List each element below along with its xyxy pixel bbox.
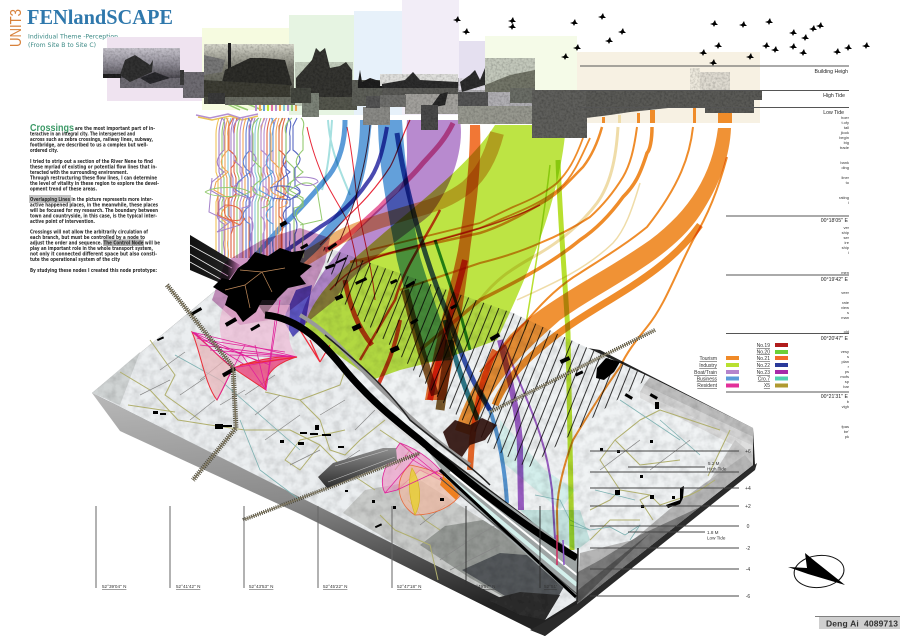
tide callouts: 1.8 M [707, 530, 719, 535]
photo: swing bridge [380, 72, 459, 130]
legend: bus routes: No.21 [757, 356, 770, 362]
right column labels: 00°19'42'' E [821, 277, 849, 283]
elevation scale: 0 [747, 524, 750, 530]
text block: crossings explanation: town and countryside, in this case, is the typical inter- [30, 214, 157, 220]
black city mass [153, 220, 684, 528]
right column labels: b [847, 399, 850, 404]
text block: crossings explanation: play an important role in the whole transport system, [30, 246, 153, 252]
right column labels: i [848, 200, 849, 205]
legend: bus routes: No.22 [757, 363, 770, 369]
elevation scale: -4 [746, 567, 750, 573]
right map sheet [265, 245, 753, 604]
right column labels: rating [839, 195, 849, 200]
right column labels: hoer [841, 115, 850, 120]
elevation scale: -6 [746, 594, 750, 600]
unit label: UNIT3 [8, 9, 25, 47]
latitude scale: 52°49'57'' N [471, 584, 495, 589]
text block: crossings explanation: Overlapping Lines in the picture represents more inter- [30, 197, 153, 203]
right column labels: fpas [841, 424, 849, 429]
photo: lighthouse [458, 58, 535, 124]
latitude scale: 52°41'42'' N [176, 584, 200, 589]
right column labels: vigh [842, 404, 849, 409]
railway lines [167, 285, 655, 520]
legend: flow categories [694, 356, 739, 389]
top comb [256, 105, 296, 111]
right column labels: man [841, 315, 849, 320]
text block: crossings explanation: will be focused for my research. The boundary between [30, 208, 158, 214]
right column labels: i [848, 250, 849, 255]
text block: crossings explanation: these myriad of existing or potential flow lines that in- [30, 164, 157, 170]
thin red and purple stubs on river wall [557, 535, 564, 565]
flock of birds [453, 13, 870, 66]
right column labels: t.ofy [841, 120, 849, 125]
right column labels: ship [842, 245, 850, 250]
latitude scale: 52°45'22'' N [323, 584, 347, 589]
ribbon: business blue, right [378, 120, 452, 362]
right column labels: ship [842, 230, 850, 235]
right column labels: liner [841, 175, 850, 180]
north arrow [788, 553, 846, 590]
legend: flow categories: Industry [699, 363, 717, 369]
legend: bus routes [757, 343, 788, 389]
latitude scale: 52°47'18'' N [397, 584, 421, 589]
photo: cathedral [291, 48, 357, 117]
map roads and waterways [120, 340, 730, 580]
text block: crossings explanation: teractive in an integral city. The interspersed and [30, 132, 135, 138]
main title: FENlandSCAPE [27, 5, 173, 29]
left black striped band [190, 235, 240, 285]
latitude scale: 52°39'04'' N [102, 584, 126, 589]
subtitle [28, 34, 118, 49]
legend: bus routes: No.19 [757, 343, 770, 349]
outlying loops [205, 177, 322, 232]
second dark crossing mass [443, 418, 497, 457]
right column labels: view [841, 305, 849, 310]
third black mass by the railway [560, 356, 620, 380]
right column labels: jlook [840, 130, 849, 135]
flow ribbons between the map and photographs [250, 120, 731, 555]
tide callouts: 5.2 M [708, 461, 720, 466]
photo: town horizon [352, 70, 390, 125]
right column labels: 00°18'05'' E [821, 218, 849, 224]
right column labels: ser [843, 235, 850, 240]
right column labels: ps [845, 369, 849, 374]
right column labels: tall [844, 125, 849, 130]
right column labels: ver [843, 225, 850, 230]
legend: flow categories: Resident [697, 383, 718, 389]
base slab of the model [92, 290, 757, 636]
right column labels: be' [844, 429, 849, 434]
legend: bus routes: Cro.7 [758, 376, 770, 382]
right column labels: to [846, 180, 850, 185]
right column labels: begin [839, 135, 849, 140]
tide callouts [707, 461, 727, 540]
text block: crossings explanation: opment trend of these areas. [30, 186, 97, 192]
elevation scale: +6 [745, 449, 751, 455]
right column labels: pk [845, 434, 849, 439]
magenta haze around the city mass [212, 228, 330, 325]
latitude scale: 52°51' [544, 584, 557, 589]
legend: bus routes: No.20 [757, 350, 770, 356]
text block: crossings explanation: across such as zebra crossings, railway lines, subway, [30, 137, 153, 143]
text block: crossings explanation: By studying these nodes I created this node prototype: [30, 268, 157, 274]
right column labels: Building Heigh [815, 69, 848, 75]
right column labels: s [847, 310, 849, 315]
right column labels: mofs [840, 374, 849, 379]
right column labels: 00°20'47'' E [821, 336, 849, 342]
right column labels: Low Tide [823, 110, 844, 116]
elevation scale: +2 [745, 504, 751, 510]
right column labels: sp [845, 379, 850, 384]
right column labels: rate [842, 300, 850, 305]
right column labels: plan [841, 359, 849, 364]
right column labels: big [844, 140, 849, 145]
legend: flow categories: Boat/Train [694, 370, 717, 376]
ribbon: business blue, left [265, 120, 372, 285]
right column labels: r [848, 364, 850, 369]
right column labels: vesy [841, 349, 849, 354]
legend: flow categories: Business [697, 376, 717, 382]
right column labels: men [841, 270, 849, 275]
ribbon: dark blue lobe [283, 285, 312, 337]
river cross-section wall [577, 548, 578, 602]
legend: flow categories: Tourism [699, 356, 717, 362]
elevation scale: +4 [745, 486, 751, 492]
right column labels: ire [845, 240, 850, 245]
photo strip [103, 43, 762, 138]
pastel panels behind photographs [107, 0, 760, 123]
elevation scale [590, 449, 751, 600]
subtitle: (From Site B to Site C) [28, 42, 96, 49]
right column labels: bank [840, 160, 849, 165]
pink flow web near second crossing [382, 443, 462, 515]
right column labels: old [844, 329, 849, 334]
text block: crossings explanation: adjust the order and sequence. The Control Node will be [30, 240, 160, 246]
text block: crossings explanation: teracted with the surrounding environment. [30, 170, 128, 176]
text block: crossings explanation: active happened places, in the meanwhile, these places [30, 202, 158, 208]
black tail at low tide [666, 486, 684, 508]
text block: crossings explanation: I tried to strip out a section of the River Nene to find [30, 159, 153, 165]
ribbon: boat and train purple [300, 120, 461, 328]
train [318, 448, 397, 488]
text block: crossings explanation: the level of vitality in these region to explore the devel- [30, 181, 159, 187]
latitude scale [96, 506, 557, 589]
author tag: Deng Ai 4089713 [826, 618, 898, 628]
ribbon: tourism main band [455, 128, 731, 435]
right column labels: ding [841, 165, 849, 170]
right column labels: trade [840, 145, 850, 150]
latitude scale: 52°43'53'' N [249, 584, 273, 589]
photo: street market [204, 43, 295, 105]
hatched upper band of right map [322, 246, 650, 468]
tide callouts: High Tide [707, 466, 727, 472]
text block: crossings explanation: are the most important part of in- [75, 126, 155, 132]
zigzag crest [196, 103, 262, 120]
text block: crossings explanation: Through restructuring these flow lines, I can determine [30, 176, 157, 182]
text block: crossings explanation: Crossings [30, 122, 74, 134]
photo: pier [103, 48, 205, 98]
text block: crossings explanation: active point of intervention. [30, 219, 95, 225]
text block: crossings explanation: footbridge, are described to us a complex but well- [30, 142, 148, 148]
legend: bus routes: X5 [764, 383, 770, 389]
right column labels: veer [841, 290, 850, 295]
text block: crossings explanation: tute the operational system of the city [30, 257, 121, 263]
right column labels: 00°21'31'' E [821, 394, 849, 400]
river channel [265, 315, 577, 600]
text block: crossings explanation: not only it connected different space but also consti- [30, 252, 157, 258]
author tag [815, 616, 900, 629]
title block [8, 5, 173, 49]
right column labels: bar [843, 384, 850, 389]
text block: crossings explanation: ordered city. [30, 148, 58, 154]
photo: marsh [532, 68, 762, 138]
text block: crossings explanation: each branch, but must be controlled by a node to [30, 235, 145, 241]
ribbon: industry green fan [305, 125, 566, 380]
tide callouts: Low Tide [707, 536, 726, 540]
text block: crossings explanation [29, 122, 160, 274]
elevation scale: -2 [746, 546, 750, 552]
overlapping flow lines bundle [196, 103, 322, 258]
tourism ribbon stubs on cream panel [602, 108, 732, 123]
right column labels [815, 69, 850, 439]
left map sheet [92, 278, 577, 620]
horizontal section rules [580, 66, 849, 392]
right column labels: s [847, 354, 849, 359]
text block: crossings explanation: Crossings will not allow the arbitrarily circulation of [30, 230, 149, 236]
ribbon: orange vertical band [425, 125, 480, 400]
legend: bus routes: No.23 [757, 370, 770, 376]
right column labels: High Tide [823, 93, 845, 99]
pink flow web on left map [192, 300, 330, 400]
ribbon strokes [250, 120, 727, 555]
subtitle: Individual Theme -Perception [28, 34, 118, 40]
